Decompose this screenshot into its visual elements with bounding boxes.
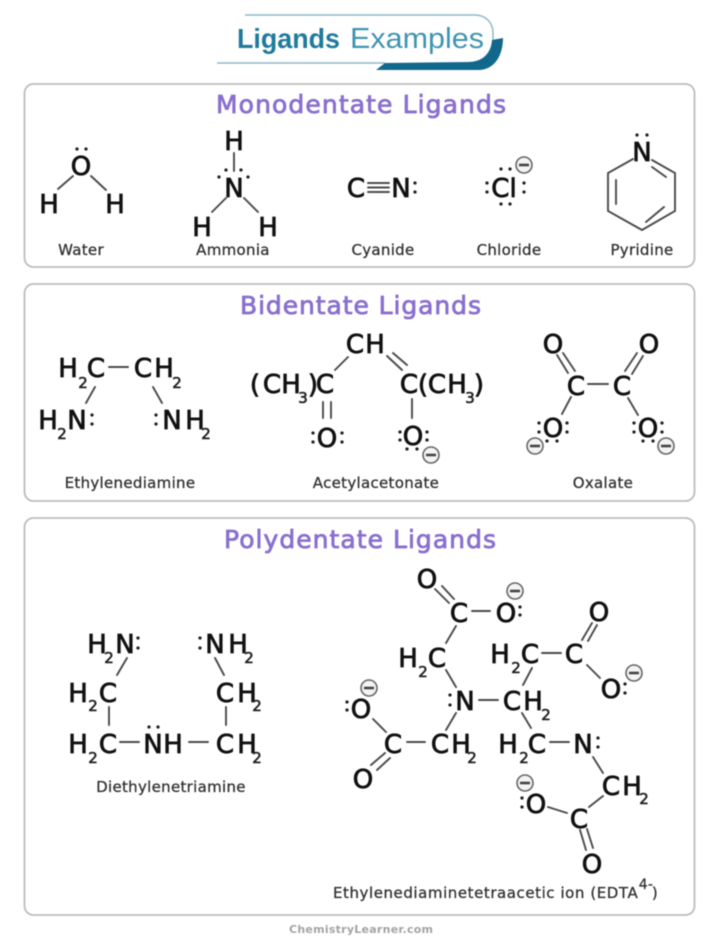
molecule: EDTA: H xyxy=(498,730,518,760)
molecule: oxalate: C xyxy=(567,372,585,402)
molecule: acetylacetonate: 3 xyxy=(298,389,308,407)
heading: bidentate: Bidentate Ligands xyxy=(240,291,481,320)
molecule: diethylenetriamine: C xyxy=(216,679,234,709)
molecule: ethylenediamine xyxy=(38,354,211,492)
molecule: EDTA: 2 xyxy=(541,706,551,724)
molecule: diethylenetriamine: H xyxy=(68,730,88,760)
molecule: pyridine: Pyridine xyxy=(610,241,674,259)
molecule: acetylacetonate: ) xyxy=(308,370,318,400)
molecule: EDTA: N xyxy=(455,687,475,717)
title banner xyxy=(217,15,503,70)
molecule: diethylenetriamine: 2 xyxy=(88,749,98,767)
footer: source: ChemistryLearner.com xyxy=(289,923,433,936)
molecule: EDTA: C xyxy=(428,644,446,674)
heading: monodentate: Monodentate Ligands xyxy=(216,90,506,119)
molecule: ethylenediamine: H xyxy=(154,354,174,384)
molecule: pyridine: N xyxy=(632,138,652,168)
molecule: acetylacetonate: O xyxy=(317,424,337,454)
molecule: ethylenediamine: H xyxy=(185,406,205,436)
molecule: acetylacetonate: 3 xyxy=(465,389,475,407)
molecule: acetylacetonate: C xyxy=(263,370,281,400)
molecule: ethylenediamine: 2 xyxy=(57,425,67,443)
label: EDTA xyxy=(333,877,658,902)
molecule: oxalate: O xyxy=(543,414,563,444)
molecule: acetylacetonate: ( xyxy=(418,370,428,400)
molecule: EDTA: O xyxy=(601,675,621,705)
molecule: cyanide: C xyxy=(347,174,365,204)
molecule: diethylenetriamine: C xyxy=(99,730,117,760)
molecule: diethylenetriamine: 2 xyxy=(104,649,114,667)
title banner: Ligands xyxy=(237,23,340,54)
molecule: ammonia: H xyxy=(192,213,212,243)
molecule: ethylenediamine: C xyxy=(87,354,105,384)
molecule: ethylenediamine: 2 xyxy=(78,374,88,392)
molecule: acetylacetonate: C xyxy=(346,330,364,360)
molecule: oxalate: O xyxy=(543,330,563,360)
molecule: EDTA: N xyxy=(573,730,593,760)
molecule: chloride xyxy=(477,157,541,259)
molecule: EDTA: C xyxy=(503,687,521,717)
molecule: EDTA: C xyxy=(431,730,449,760)
molecule: ammonia: Ammonia xyxy=(196,241,270,259)
molecule: EDTA: C xyxy=(384,730,402,760)
molecule: diethylenetriamine: 2 xyxy=(88,697,98,715)
molecule: water xyxy=(39,149,125,259)
molecule: EDTA: H xyxy=(523,687,543,717)
molecule: ethylenediamine: C xyxy=(134,354,152,384)
molecule: chloride: Cl xyxy=(491,174,517,204)
molecule: EDTA xyxy=(333,565,658,902)
molecule: diethylenetriamine: H xyxy=(237,679,257,709)
title banner: Examples xyxy=(350,23,484,55)
molecule: EDTA: 2 xyxy=(519,749,529,767)
molecule: acetylacetonate: C xyxy=(428,370,446,400)
molecule: acetylacetonate: O xyxy=(403,422,423,452)
label: EDTA: Ethylenediaminetetraacetic ion (EDTA xyxy=(333,884,638,902)
molecule: diethylenetriamine: 2 xyxy=(244,649,254,667)
molecule: EDTA: 2 xyxy=(467,749,477,767)
molecule: diethylenetriamine: 2 xyxy=(252,697,262,715)
molecule: diethylenetriamine: 2 xyxy=(252,749,262,767)
molecule: ammonia: H xyxy=(258,213,278,243)
molecule: oxalate xyxy=(527,330,674,492)
molecule: water: Water xyxy=(58,241,104,259)
molecule: EDTA: C xyxy=(528,730,546,760)
molecule: water: H xyxy=(105,190,125,220)
molecule: ethylenediamine: H xyxy=(58,354,78,384)
molecule: diethylenetriamine: N xyxy=(143,730,163,760)
molecule: EDTA: O xyxy=(417,565,437,595)
molecule: chloride: Chloride xyxy=(477,241,541,259)
molecule: ammonia: N xyxy=(224,174,244,204)
label: EDTA: ) xyxy=(652,884,658,902)
molecule: EDTA: 2 xyxy=(639,790,649,808)
molecule: oxalate: O xyxy=(638,414,658,444)
molecule: diethylenetriamine: H xyxy=(87,630,107,660)
molecule: ammonia xyxy=(192,127,278,259)
molecule: cyanide xyxy=(347,174,415,259)
molecule: acetylacetonate: Acetylacetonate xyxy=(313,474,439,492)
molecule: cyanide: Cyanide xyxy=(351,241,415,259)
molecule: acetylacetonate: C xyxy=(400,370,418,400)
molecule: oxalate: Oxalate xyxy=(573,474,633,492)
molecule: EDTA: C xyxy=(570,805,588,835)
molecule: acetylacetonate xyxy=(250,330,484,492)
molecule: EDTA: C xyxy=(450,599,468,629)
molecule: EDTA: C xyxy=(602,772,620,802)
molecule: acetylacetonate: H xyxy=(365,330,385,360)
molecule: ethylenediamine: 2 xyxy=(201,425,211,443)
molecule: oxalate: O xyxy=(639,330,659,360)
molecule: diethylenetriamine: N xyxy=(205,630,225,660)
molecule: EDTA: O xyxy=(353,765,373,795)
molecule: ethylenediamine: H xyxy=(38,406,58,436)
molecule: EDTA: O xyxy=(589,598,609,628)
molecule: acetylacetonate: H xyxy=(447,370,467,400)
molecule: ethylenediamine: N xyxy=(67,406,87,436)
panel: monodentate ligands xyxy=(24,84,694,267)
heading: polydentate: Polydentate Ligands xyxy=(224,525,496,554)
molecule: water: H xyxy=(39,190,59,220)
molecule: EDTA: H xyxy=(398,644,418,674)
molecule: ethylenediamine: Ethylenediamine xyxy=(65,474,195,492)
molecule: EDTA: H xyxy=(622,772,642,802)
molecule: EDTA: 2 xyxy=(418,663,428,681)
molecule: EDTA: C xyxy=(521,640,539,670)
molecule: EDTA: 2 xyxy=(511,659,521,677)
molecule: diethylenetriamine: C xyxy=(99,679,117,709)
molecule: ethylenediamine: 2 xyxy=(172,374,182,392)
molecule: diethylenetriamine: H xyxy=(68,679,88,709)
molecule: EDTA: H xyxy=(451,730,471,760)
molecule: ethylenediamine: N xyxy=(162,406,182,436)
molecule: EDTA: O xyxy=(582,850,602,880)
molecule: acetylacetonate: C xyxy=(316,370,334,400)
panel: polydentate ligands xyxy=(24,518,694,915)
molecule: diethylenetriamine: Diethylenetriamine xyxy=(96,778,246,796)
molecule: EDTA: O xyxy=(496,599,516,629)
molecule: EDTA: H xyxy=(490,640,510,670)
molecule: EDTA: O xyxy=(526,790,546,820)
molecule: diethylenetriamine: H xyxy=(163,730,183,760)
molecule: diethylenetriamine: H xyxy=(237,730,257,760)
molecule: EDTA: C xyxy=(565,640,583,670)
panel: bidentate ligands xyxy=(24,284,694,501)
molecule: cyanide: N xyxy=(391,174,411,204)
molecule: EDTA: O xyxy=(351,695,371,725)
molecule: acetylacetonate: ) xyxy=(474,370,484,400)
molecule: diethylenetriamine: N xyxy=(115,630,135,660)
molecule: pyridine xyxy=(608,135,675,259)
molecule: water: O xyxy=(71,152,91,182)
molecule: diethylenetriamine xyxy=(68,630,262,796)
molecule: acetylacetonate: ( xyxy=(250,370,260,400)
molecule: diethylenetriamine: H xyxy=(228,630,248,660)
label: EDTA: 4- xyxy=(639,877,653,893)
molecule: oxalate: C xyxy=(613,372,631,402)
molecule: acetylacetonate: H xyxy=(281,370,301,400)
molecule: diethylenetriamine: C xyxy=(216,730,234,760)
molecule: ammonia: H xyxy=(224,127,244,157)
